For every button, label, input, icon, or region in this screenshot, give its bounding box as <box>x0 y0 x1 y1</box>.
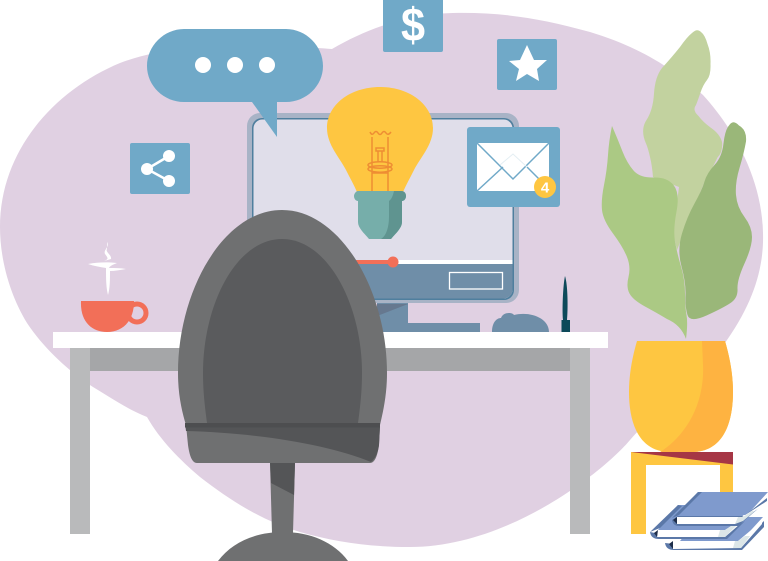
icon: mail tile <box>467 127 560 207</box>
middle book <box>650 505 745 539</box>
right leaf <box>679 122 752 319</box>
left leaf <box>602 126 687 339</box>
plant <box>602 30 752 339</box>
icon: pen <box>562 276 570 332</box>
office chair <box>178 210 387 561</box>
icon: share tile <box>130 143 190 194</box>
icon: speech bubble <box>147 29 323 137</box>
back leaf <box>643 30 722 250</box>
chair base <box>218 532 348 561</box>
stool <box>631 452 733 534</box>
mail count badge: 4 <box>541 180 550 196</box>
plant pot <box>629 341 733 452</box>
desk <box>53 332 608 534</box>
icon: star tile <box>497 39 557 90</box>
icon: coffee cup <box>81 301 146 332</box>
chair stem <box>270 463 295 533</box>
icon: mouse <box>492 313 549 332</box>
icon: dollar tile <box>383 0 443 52</box>
bottom book <box>665 517 764 550</box>
icon: light bulb <box>327 87 433 239</box>
chair seat band <box>185 423 380 462</box>
top book <box>672 492 768 526</box>
monitor <box>247 113 519 332</box>
icon: steam <box>88 242 126 295</box>
stack of books <box>650 492 768 550</box>
chair back <box>178 210 387 463</box>
